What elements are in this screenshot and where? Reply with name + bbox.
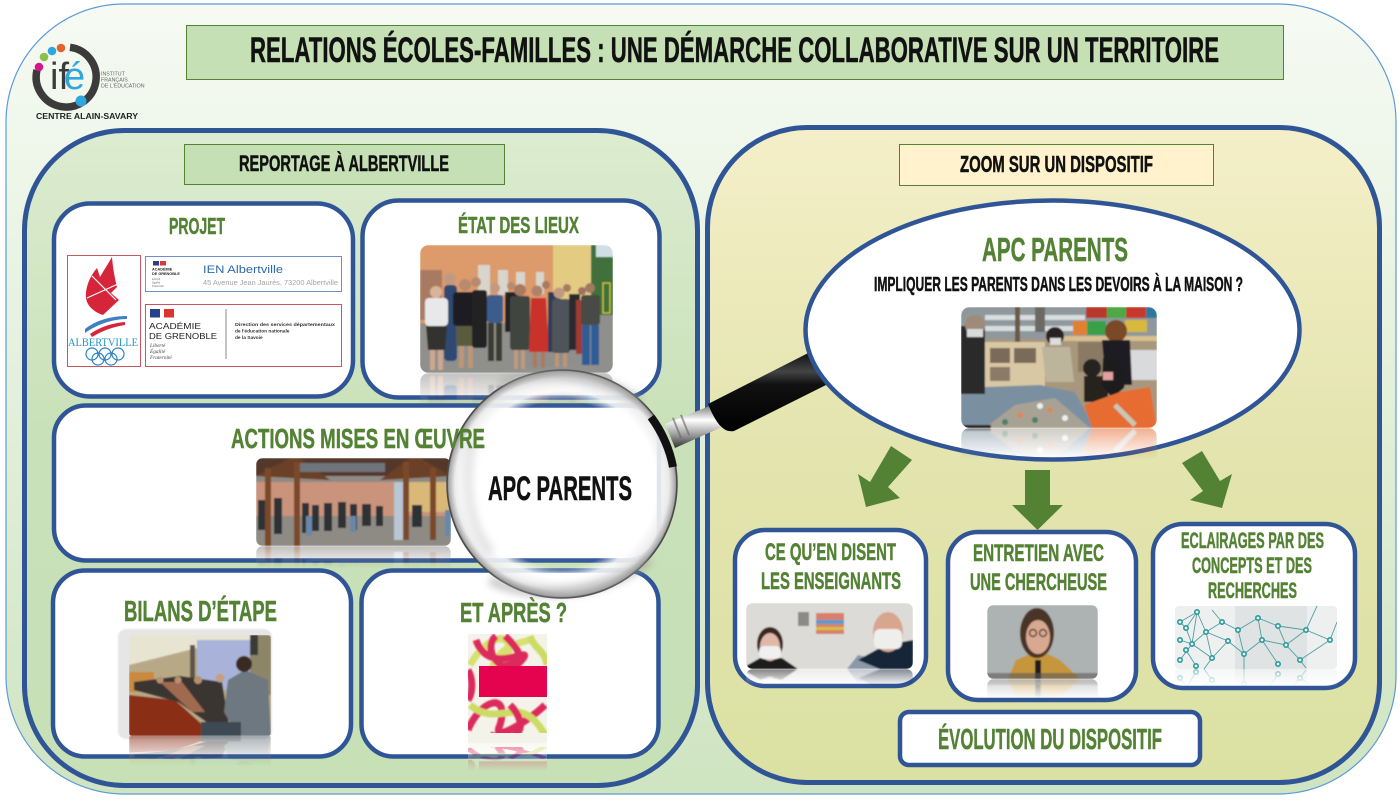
card title: CONCEPTS ET DES <box>1192 553 1312 578</box>
book cover <box>468 634 547 743</box>
card title <box>761 539 901 595</box>
card: projet <box>54 204 353 396</box>
oval title: APC PARENTS <box>982 231 1128 268</box>
photo halo <box>118 629 272 739</box>
photo reflection <box>420 373 613 404</box>
photo reflection <box>256 546 451 566</box>
logo: IEN Albertville <box>146 256 342 292</box>
logo: Académie de Grenoble: DE GRENOBLE <box>149 331 217 341</box>
logo: IEN Albertville: Fraternité <box>151 285 164 288</box>
logo: IEN Albertville: ACADÉMIE <box>152 266 173 272</box>
arrow: to teachers <box>858 446 912 507</box>
logo: ifé centre Alain-Savary: CENTRE ALAIN-SAVARY <box>36 112 139 121</box>
card title: bilans: BILANS D’ÉTAPE <box>124 594 277 628</box>
card title: RECHERCHES <box>1208 578 1297 603</box>
lens label: APC PARENTS <box>488 470 632 508</box>
card title: état des lieux: ÉTAT DES LIEUX <box>458 211 579 238</box>
logo: ifé centre Alain-Savary: FRANÇAIS <box>101 78 128 84</box>
card title: et après: ET APRÈS ? <box>460 597 567 628</box>
card title <box>1181 528 1324 603</box>
card title: CE QU’EN DISENT <box>765 539 896 566</box>
photo: meeting room <box>129 635 271 736</box>
logo: Académie de Grenoble: de la Savoie <box>235 335 263 341</box>
icon: magnifier handle <box>665 346 840 448</box>
photo reflection <box>746 669 913 684</box>
card: et après <box>362 570 658 787</box>
logo: Albertville: ALBERTVILLE <box>68 337 138 349</box>
card title: LES ENSEIGNANTS <box>761 568 901 595</box>
logo: Académie de Grenoble: ACADÉMIE <box>149 321 201 331</box>
card: actions mises en oeuvre <box>52 403 662 566</box>
image: network <box>1175 606 1337 669</box>
card: éclairages <box>1150 522 1358 690</box>
arrow: to concepts <box>1182 451 1232 508</box>
logo: IEN Albertville: 45 Avenue Jean Jaurès, 73200 Albertville <box>203 280 338 287</box>
logo: ifé centre Alain-Savary: DE L'ÉDUCATION <box>101 82 145 90</box>
card: bilans d'étape <box>53 570 351 776</box>
logo: Académie de Grenoble: Égalité <box>149 347 166 355</box>
photo: researcher <box>987 605 1098 679</box>
panel: zoom sur un dispositif <box>665 128 1380 782</box>
logo: IEN Albertville: Égalité <box>151 282 161 284</box>
card title: actions: ACTIONS MISES EN ŒUVRE <box>231 423 485 454</box>
card: ce qu'en disent les enseignants <box>732 528 928 688</box>
photo: group in a schoolyard <box>420 245 613 373</box>
photo reflection <box>961 428 1157 456</box>
photo: covered market with crowd <box>256 458 451 546</box>
photo reflection <box>987 679 1098 698</box>
photo: parents and pupils at a table <box>961 307 1157 428</box>
logo: Albertville <box>68 256 140 366</box>
logo: Académie de Grenoble: Fraternité <box>149 355 172 361</box>
logo: Académie de Grenoble: Liberté <box>149 343 166 349</box>
logo: ifé centre Alain-Savary: é <box>64 56 85 98</box>
logo: ifé centre Alain-Savary: if <box>50 56 69 98</box>
logo: Académie de Grenoble <box>146 304 342 366</box>
card title: projet: PROJET <box>169 213 225 239</box>
card title: UNE CHERCHEUSE <box>970 569 1107 596</box>
logo: ifé centre Alain-Savary <box>35 44 145 121</box>
oval: APC parents <box>803 198 1302 462</box>
panel: reportage à Albertville <box>24 130 698 787</box>
photo reflection <box>468 743 547 769</box>
image reflection <box>1175 669 1337 686</box>
logo: IEN Albertville: IEN Albertville <box>203 264 283 276</box>
logo: Académie de Grenoble: Direction des services départementaux <box>235 322 335 328</box>
icon: magnifying glass lens <box>447 370 677 598</box>
photo: two masked teachers <box>746 603 913 669</box>
logo: ifé centre Alain-Savary: INSTITUT <box>101 72 126 78</box>
card: évolution du dispositif <box>900 712 1200 765</box>
logo: IEN Albertville: DE GRENOBLE <box>152 272 180 276</box>
logo: IEN Albertville: Liberté <box>151 278 161 281</box>
heading: zoom: ZOOM SUR UN DISPOSITIF <box>960 151 1153 177</box>
heading: reportage: REPORTAGE À ALBERTVILLE <box>239 151 449 176</box>
card title <box>970 540 1107 596</box>
card: état des lieux <box>360 198 662 404</box>
arrow: to researcher <box>1012 470 1063 530</box>
logo: Académie de Grenoble: de l'éducation nationale <box>235 328 290 334</box>
heading: reportage <box>184 144 504 184</box>
photo reflection <box>129 736 271 764</box>
heading: zoom <box>900 144 1214 186</box>
card title: ENTRETIEN AVEC <box>973 540 1104 567</box>
title banner <box>186 26 1284 80</box>
card: entretien avec une chercheuse <box>946 530 1138 702</box>
card: évolution du dispositif: ÉVOLUTION DU DISPOSITIF <box>938 722 1162 756</box>
